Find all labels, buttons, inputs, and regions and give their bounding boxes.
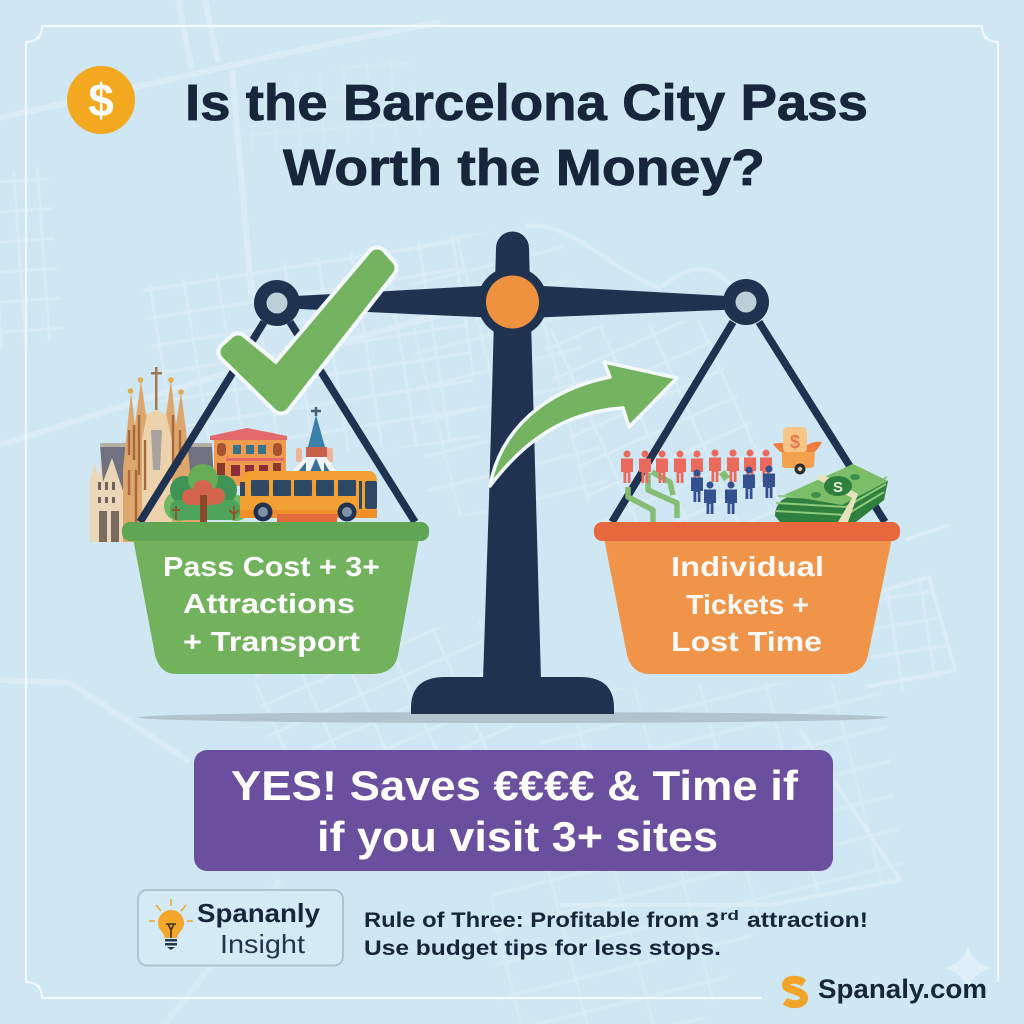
insight note: attraction!: [747, 909, 868, 932]
logo mark: [785, 980, 804, 1004]
icon: stack of money: [775, 464, 888, 522]
icon: green check mark: [228, 257, 387, 404]
icon: green curved arrow: [490, 362, 677, 486]
scale base: [411, 677, 614, 714]
right pivot: [723, 279, 769, 325]
individual tickets label: Tickets +: [686, 589, 809, 620]
icon: palace building: [210, 428, 287, 486]
title: Is the Barcelona City Pass: [185, 74, 868, 131]
icon: dollar coin: [67, 66, 135, 134]
individual tickets label: Individual: [671, 551, 824, 582]
verdict text: if you visit 3+ sites: [317, 813, 718, 860]
icon: green queue paths: [628, 472, 727, 522]
icon: cost cart: [773, 427, 822, 474]
panel: individual tickets basket: [594, 522, 900, 674]
icon: Sagrada Familia: [90, 367, 214, 542]
individual tickets label: [671, 551, 824, 657]
verdict text: YES! Saves €€€€ & Time if: [231, 762, 799, 809]
badge title: Spananly: [197, 898, 321, 928]
title: Worth the Money?: [283, 139, 765, 196]
right basket ropes: [612, 322, 885, 522]
individual tickets label: Lost Time: [671, 626, 822, 657]
insight note: rd: [720, 907, 739, 923]
balance scale: [140, 232, 885, 714]
icon: light bulb: [149, 899, 193, 950]
pass cost label: [163, 551, 380, 657]
ground shadow: [138, 712, 888, 723]
centre hub: [478, 267, 548, 337]
scale beam: [277, 285, 746, 318]
icon: stack of money: S: [833, 479, 843, 496]
insight note: Rule of Three: Profitable from 3: [364, 909, 719, 932]
title: [185, 74, 868, 196]
icon: red queue of people: [621, 450, 772, 483]
insight badge: [138, 890, 343, 966]
verdict text: [231, 762, 799, 860]
pass cost label: + Transport: [183, 626, 360, 657]
pass cost label: Pass Cost + 3+: [163, 551, 380, 582]
left basket ropes: [140, 322, 415, 522]
panel: pass cost basket: [122, 522, 429, 674]
logo wordmark: Spanaly.com: [818, 974, 987, 1004]
verdict banner: [194, 750, 833, 871]
icon: dollar coin: $: [88, 74, 114, 126]
icon: orange bus: [240, 471, 377, 522]
icon: blue group of people: [691, 466, 775, 514]
insight note: [364, 907, 868, 960]
logo: [785, 974, 987, 1004]
scale post: [483, 232, 541, 680]
pass cost label: Attractions: [183, 588, 355, 619]
insight note: Use budget tips for less stops.: [364, 937, 721, 960]
sparkle: [944, 945, 992, 992]
icon: trees: [164, 464, 249, 522]
badge subtitle: Insight: [220, 929, 306, 959]
icon: cost cart: $: [790, 432, 800, 452]
left pivot: [254, 280, 300, 326]
icon: Gaudi tower: [291, 407, 337, 472]
